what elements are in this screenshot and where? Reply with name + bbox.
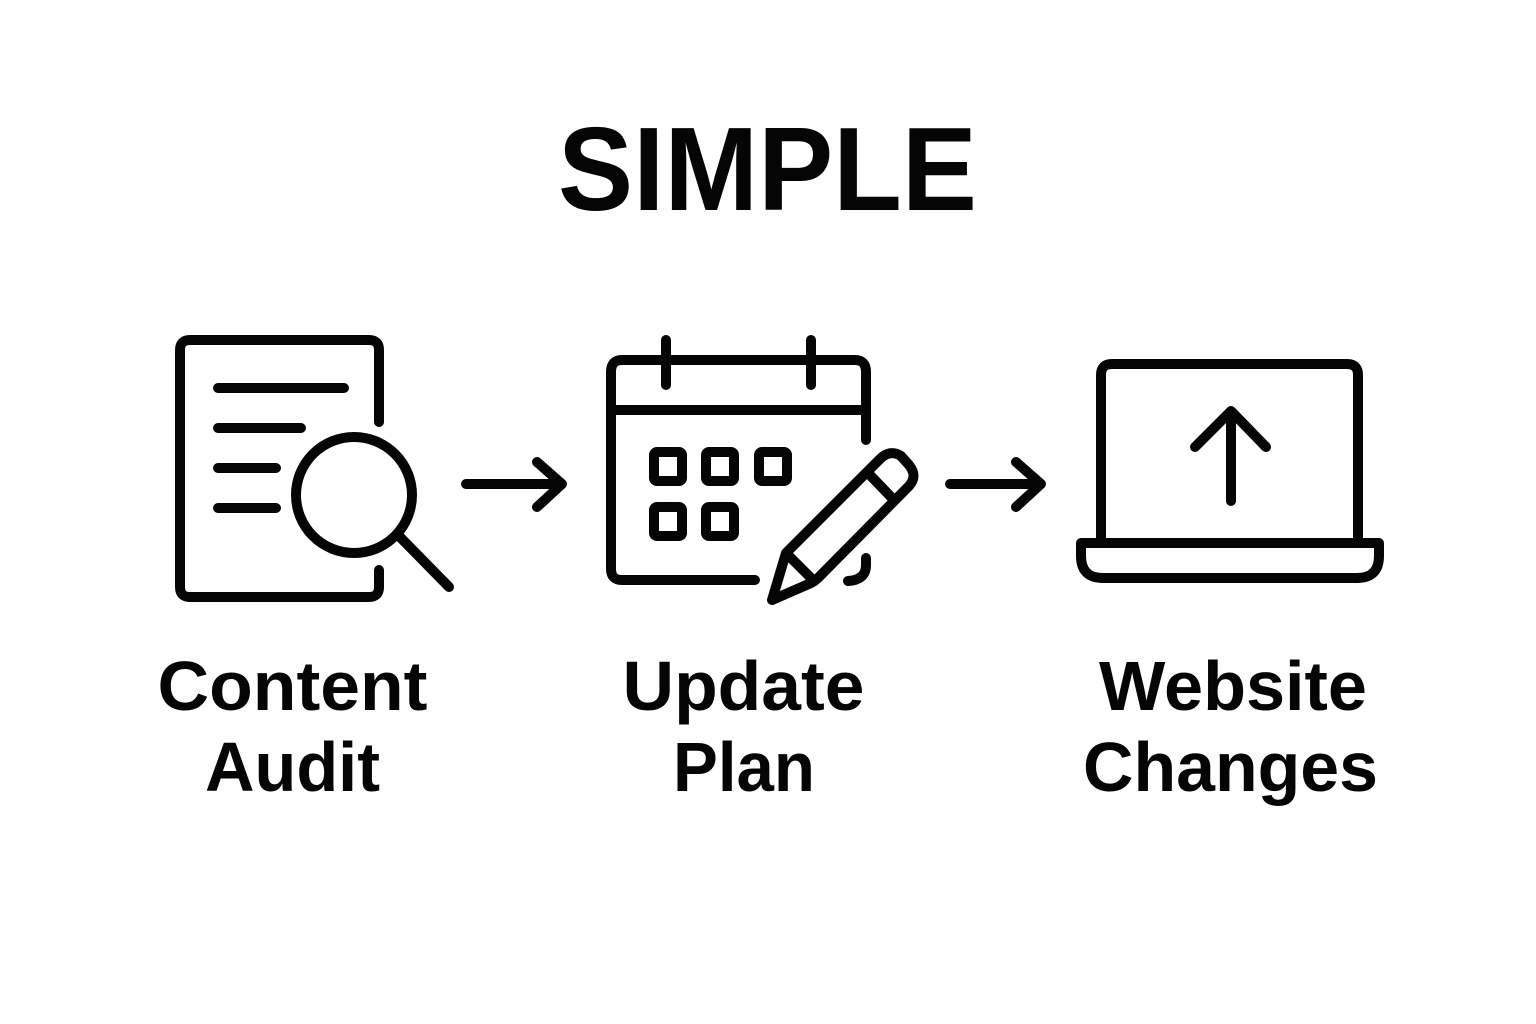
label: Content Audit: Audit — [205, 728, 380, 806]
label: Update Plan — [622, 647, 864, 806]
icon: calendar with pencil — [611, 340, 914, 600]
icon: laptop with upload arrow — [1081, 364, 1379, 578]
arrow: plan to website — [950, 462, 1041, 507]
label: Update Plan: Update — [622, 647, 864, 725]
label: Update Plan: Plan — [673, 728, 815, 806]
label: Website Changes: Changes — [1083, 728, 1378, 806]
title: SIMPLE — [558, 103, 977, 236]
label: Content Audit: Content — [158, 647, 428, 725]
label: Website Changes: Website — [1099, 647, 1367, 725]
label: Website Changes — [1083, 647, 1378, 806]
arrow: audit to plan — [466, 462, 562, 507]
label: Content Audit — [158, 647, 428, 806]
icon: document with magnifying glass — [180, 340, 449, 597]
